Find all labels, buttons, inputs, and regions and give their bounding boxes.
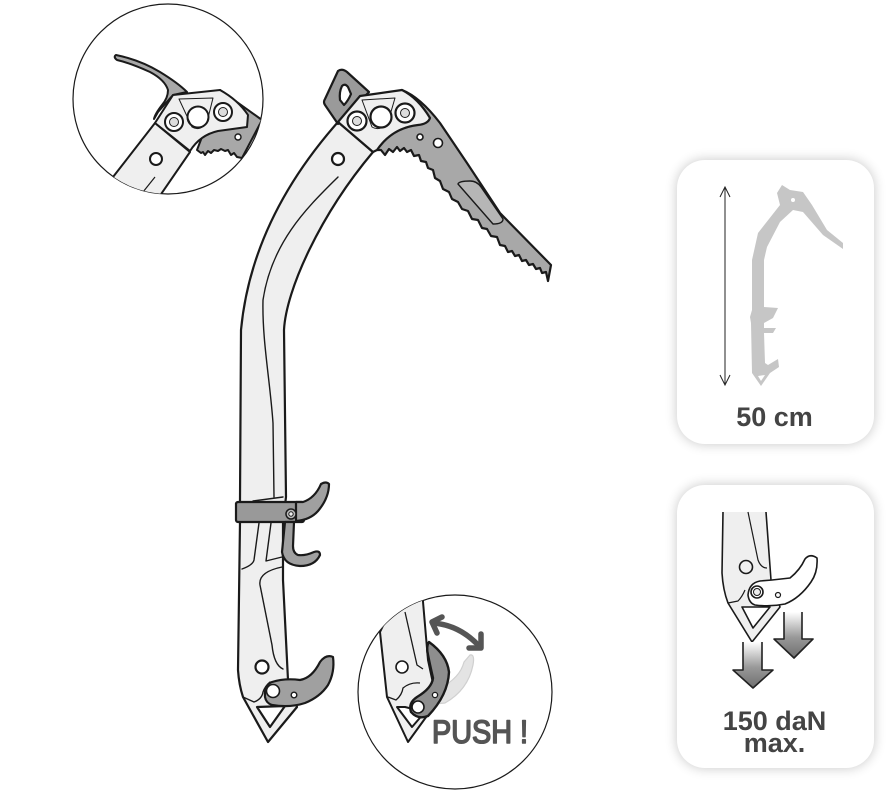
bottom hook <box>265 656 333 706</box>
shaft hole lower <box>256 660 268 674</box>
card: length <box>677 160 874 444</box>
upper grip band <box>236 502 304 522</box>
length label: 50 cm <box>736 402 813 432</box>
spike cut-out <box>257 706 285 727</box>
force arrow right <box>774 612 813 658</box>
head plate inset <box>362 98 395 129</box>
grip pivot <box>286 509 296 519</box>
push double arrow <box>432 617 481 648</box>
force arrow left <box>733 642 773 688</box>
lower finger hook <box>282 522 320 566</box>
bottom hook pivot <box>266 684 280 698</box>
head detail pick <box>197 90 262 158</box>
shaft inner lines <box>242 177 338 702</box>
push detail line <box>405 612 423 669</box>
tool silhouette <box>750 185 843 386</box>
detail circle: push <box>358 590 552 789</box>
head detail line and hole <box>143 153 162 192</box>
length arrow <box>720 187 730 385</box>
head detail hole <box>235 134 241 140</box>
head detail plate <box>155 90 248 151</box>
push detail hole <box>396 661 408 673</box>
head bolts <box>348 104 414 130</box>
top loop <box>324 70 369 124</box>
strength tool <box>722 512 817 642</box>
push detail pivot <box>412 701 424 713</box>
strength label: 150 daN <box>723 706 826 736</box>
pick <box>377 90 551 281</box>
push detail hook <box>410 642 449 717</box>
shaft hole upper <box>332 153 344 165</box>
main ice tool <box>236 70 551 742</box>
detail circle: head <box>73 4 263 200</box>
push detail ghost hook <box>439 654 474 704</box>
push label: PUSH ! <box>432 714 528 750</box>
pick holes <box>417 134 423 140</box>
strength label max: max. <box>744 728 805 758</box>
bottom hook small hole <box>291 692 297 698</box>
head detail shaft <box>112 122 191 194</box>
upper finger hook <box>296 482 329 521</box>
head plate <box>338 90 430 152</box>
push detail shaft <box>379 600 432 743</box>
head detail adze <box>115 55 187 119</box>
card: strength <box>677 485 874 768</box>
pick slot <box>458 181 503 224</box>
head detail inset <box>179 98 213 129</box>
head detail bolts <box>165 103 232 131</box>
top loop hole <box>340 85 351 105</box>
push detail small hole <box>432 692 438 698</box>
shaft <box>238 122 373 742</box>
push detail cut-out <box>397 707 425 727</box>
